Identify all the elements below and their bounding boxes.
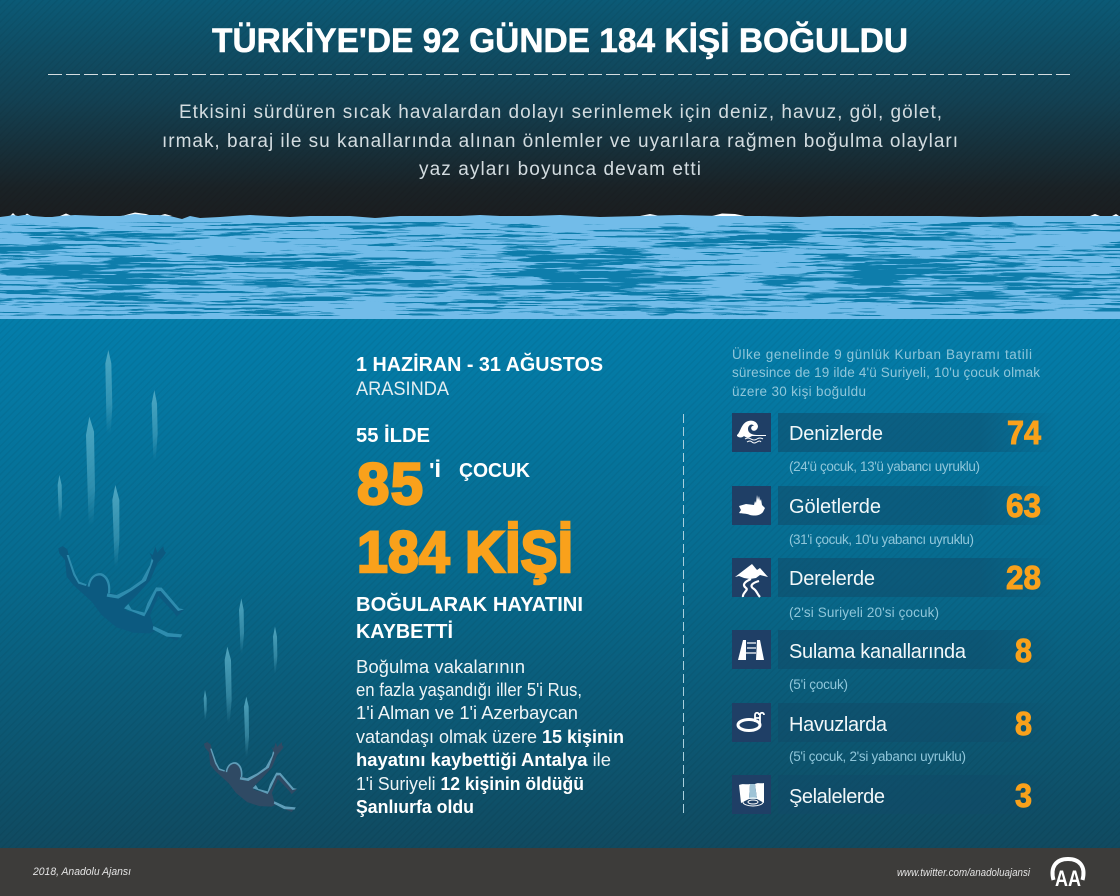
text block: most affected provinces: Boğulma vakalarının <box>356 657 525 677</box>
row: streams: 28 <box>1006 559 1041 596</box>
text block: Kurban Bayramı note <box>732 347 1040 399</box>
stat: 184 people: 184 KİŞİ <box>357 520 573 585</box>
note: pools: (5'i çocuk, 2'si yabancı uyruklu) <box>789 749 966 764</box>
illustration: upper drowning figure <box>58 546 184 641</box>
water surface band <box>0 210 1120 320</box>
title: TÜRKİYE'DE 92 GÜNDE 184 KİŞİ BOĞULDU <box>212 22 908 60</box>
stat: 85 children: 85 <box>357 452 423 517</box>
heading: date range: 1 HAZİRAN - 31 AĞUSTOS <box>356 352 603 376</box>
heading: date range: ARASINDA <box>356 379 449 400</box>
icon: pond <box>732 486 771 525</box>
text block: most affected provinces <box>356 657 624 817</box>
row: seas: Denizlerde <box>789 423 883 445</box>
stat: 85 children: ÇOCUK <box>459 460 531 482</box>
note: ponds: (31'i çocuk, 10'u yabancı uyruklu) <box>789 532 974 547</box>
row: irrigation canals: Sulama kanallarında <box>789 641 967 663</box>
text block: most affected provinces: Şanlıurfa oldu <box>356 797 474 817</box>
text block: most affected provinces: vatandaşı olmak üzere 15 kişinin <box>356 727 624 747</box>
row: ponds: Göletlerde <box>789 496 881 518</box>
text block: most affected provinces: hayatını kaybettiği Antalya ile <box>356 750 611 770</box>
intro text block: Etkisini sürdüren sıcak havalardan dolayı serinlemek için deniz, havuz, göl, gölet, <box>179 102 942 123</box>
text block: most affected provinces: en fazla yaşandığı iller 5'i Rus, <box>356 680 582 700</box>
text: lost their lives: BOĞULARAK HAYATINI <box>356 592 583 616</box>
heading: date range <box>356 352 603 400</box>
stat: 85 children <box>357 452 531 517</box>
illustration: lower drowning figure <box>204 742 297 812</box>
stat: 85 children: 'İ <box>429 459 441 482</box>
text: 55 provinces: 55 İLDE <box>356 424 430 447</box>
text: twitter url: www.twitter.com/anadoluajansi <box>897 867 1030 879</box>
icon: mountain stream <box>732 558 771 597</box>
row: streams: Derelerde <box>789 568 875 590</box>
panel: footer bar <box>0 848 1120 896</box>
row: streams <box>732 558 1058 597</box>
icon: Anadolu Agency logo <box>1053 859 1083 891</box>
icon: waterfall <box>732 775 771 814</box>
row: irrigation canals <box>732 630 1058 669</box>
intro text block <box>162 102 958 180</box>
note: seas: (24'ü çocuk, 13'ü yabancı uyruklu) <box>789 459 980 474</box>
row: ponds: 63 <box>1006 487 1041 524</box>
text block: most affected provinces: 1'i Suriyeli 12 kişinin öldüğü <box>356 774 584 794</box>
illustration: rising bubbles upper figure <box>58 350 158 567</box>
row: seas <box>732 413 1058 452</box>
text block: Kurban Bayramı note: Ülke genelinde 9 günlük Kurban Bayramı tatili <box>732 347 1032 362</box>
row: ponds <box>732 486 1058 525</box>
row: pools <box>732 703 1058 742</box>
row: seas: 74 <box>1007 414 1042 451</box>
text: copyright: 2018, Anadolu Ajansı <box>32 866 131 878</box>
panel: deep sea background <box>0 316 1120 850</box>
text block: Kurban Bayramı note: süresince de 19 ilde 4'ü Suriyeli, 10'u çocuk olmak <box>732 365 1040 380</box>
illustration: rising bubbles lower figure <box>204 598 277 757</box>
icon: Anadolu Agency logo: AA <box>1055 866 1081 891</box>
note: streams: (2'si Suriyeli 20'si çocuk) <box>789 605 939 620</box>
text: lost their lives: KAYBETTİ <box>356 620 453 643</box>
icon: canal <box>732 630 771 669</box>
note: irrigation canals: (5'i çocuk) <box>789 677 848 692</box>
row: irrigation canals: 8 <box>1015 632 1032 669</box>
text: lost their lives <box>356 592 583 643</box>
panel: dark sky header background <box>0 0 1120 222</box>
icon: pool <box>732 703 771 742</box>
text block: most affected provinces: 1'i Alman ve 1'i Azerbaycan <box>356 703 578 723</box>
intro text block: ırmak, baraj ile su kanallarında alınan önlemler ve uyarılara rağmen boğulma olayları <box>162 131 958 152</box>
icon: wave <box>732 413 771 452</box>
text block: Kurban Bayramı note: üzere 30 kişi boğuldu <box>732 384 866 399</box>
row: waterfalls <box>732 775 1058 814</box>
row: waterfalls: Şelalelerde <box>789 786 885 808</box>
row: pools: Havuzlarda <box>789 714 888 736</box>
intro text block: yaz ayları boyunca devam etti <box>419 159 701 180</box>
row: waterfalls: 3 <box>1015 777 1032 814</box>
row: pools: 8 <box>1015 705 1032 742</box>
